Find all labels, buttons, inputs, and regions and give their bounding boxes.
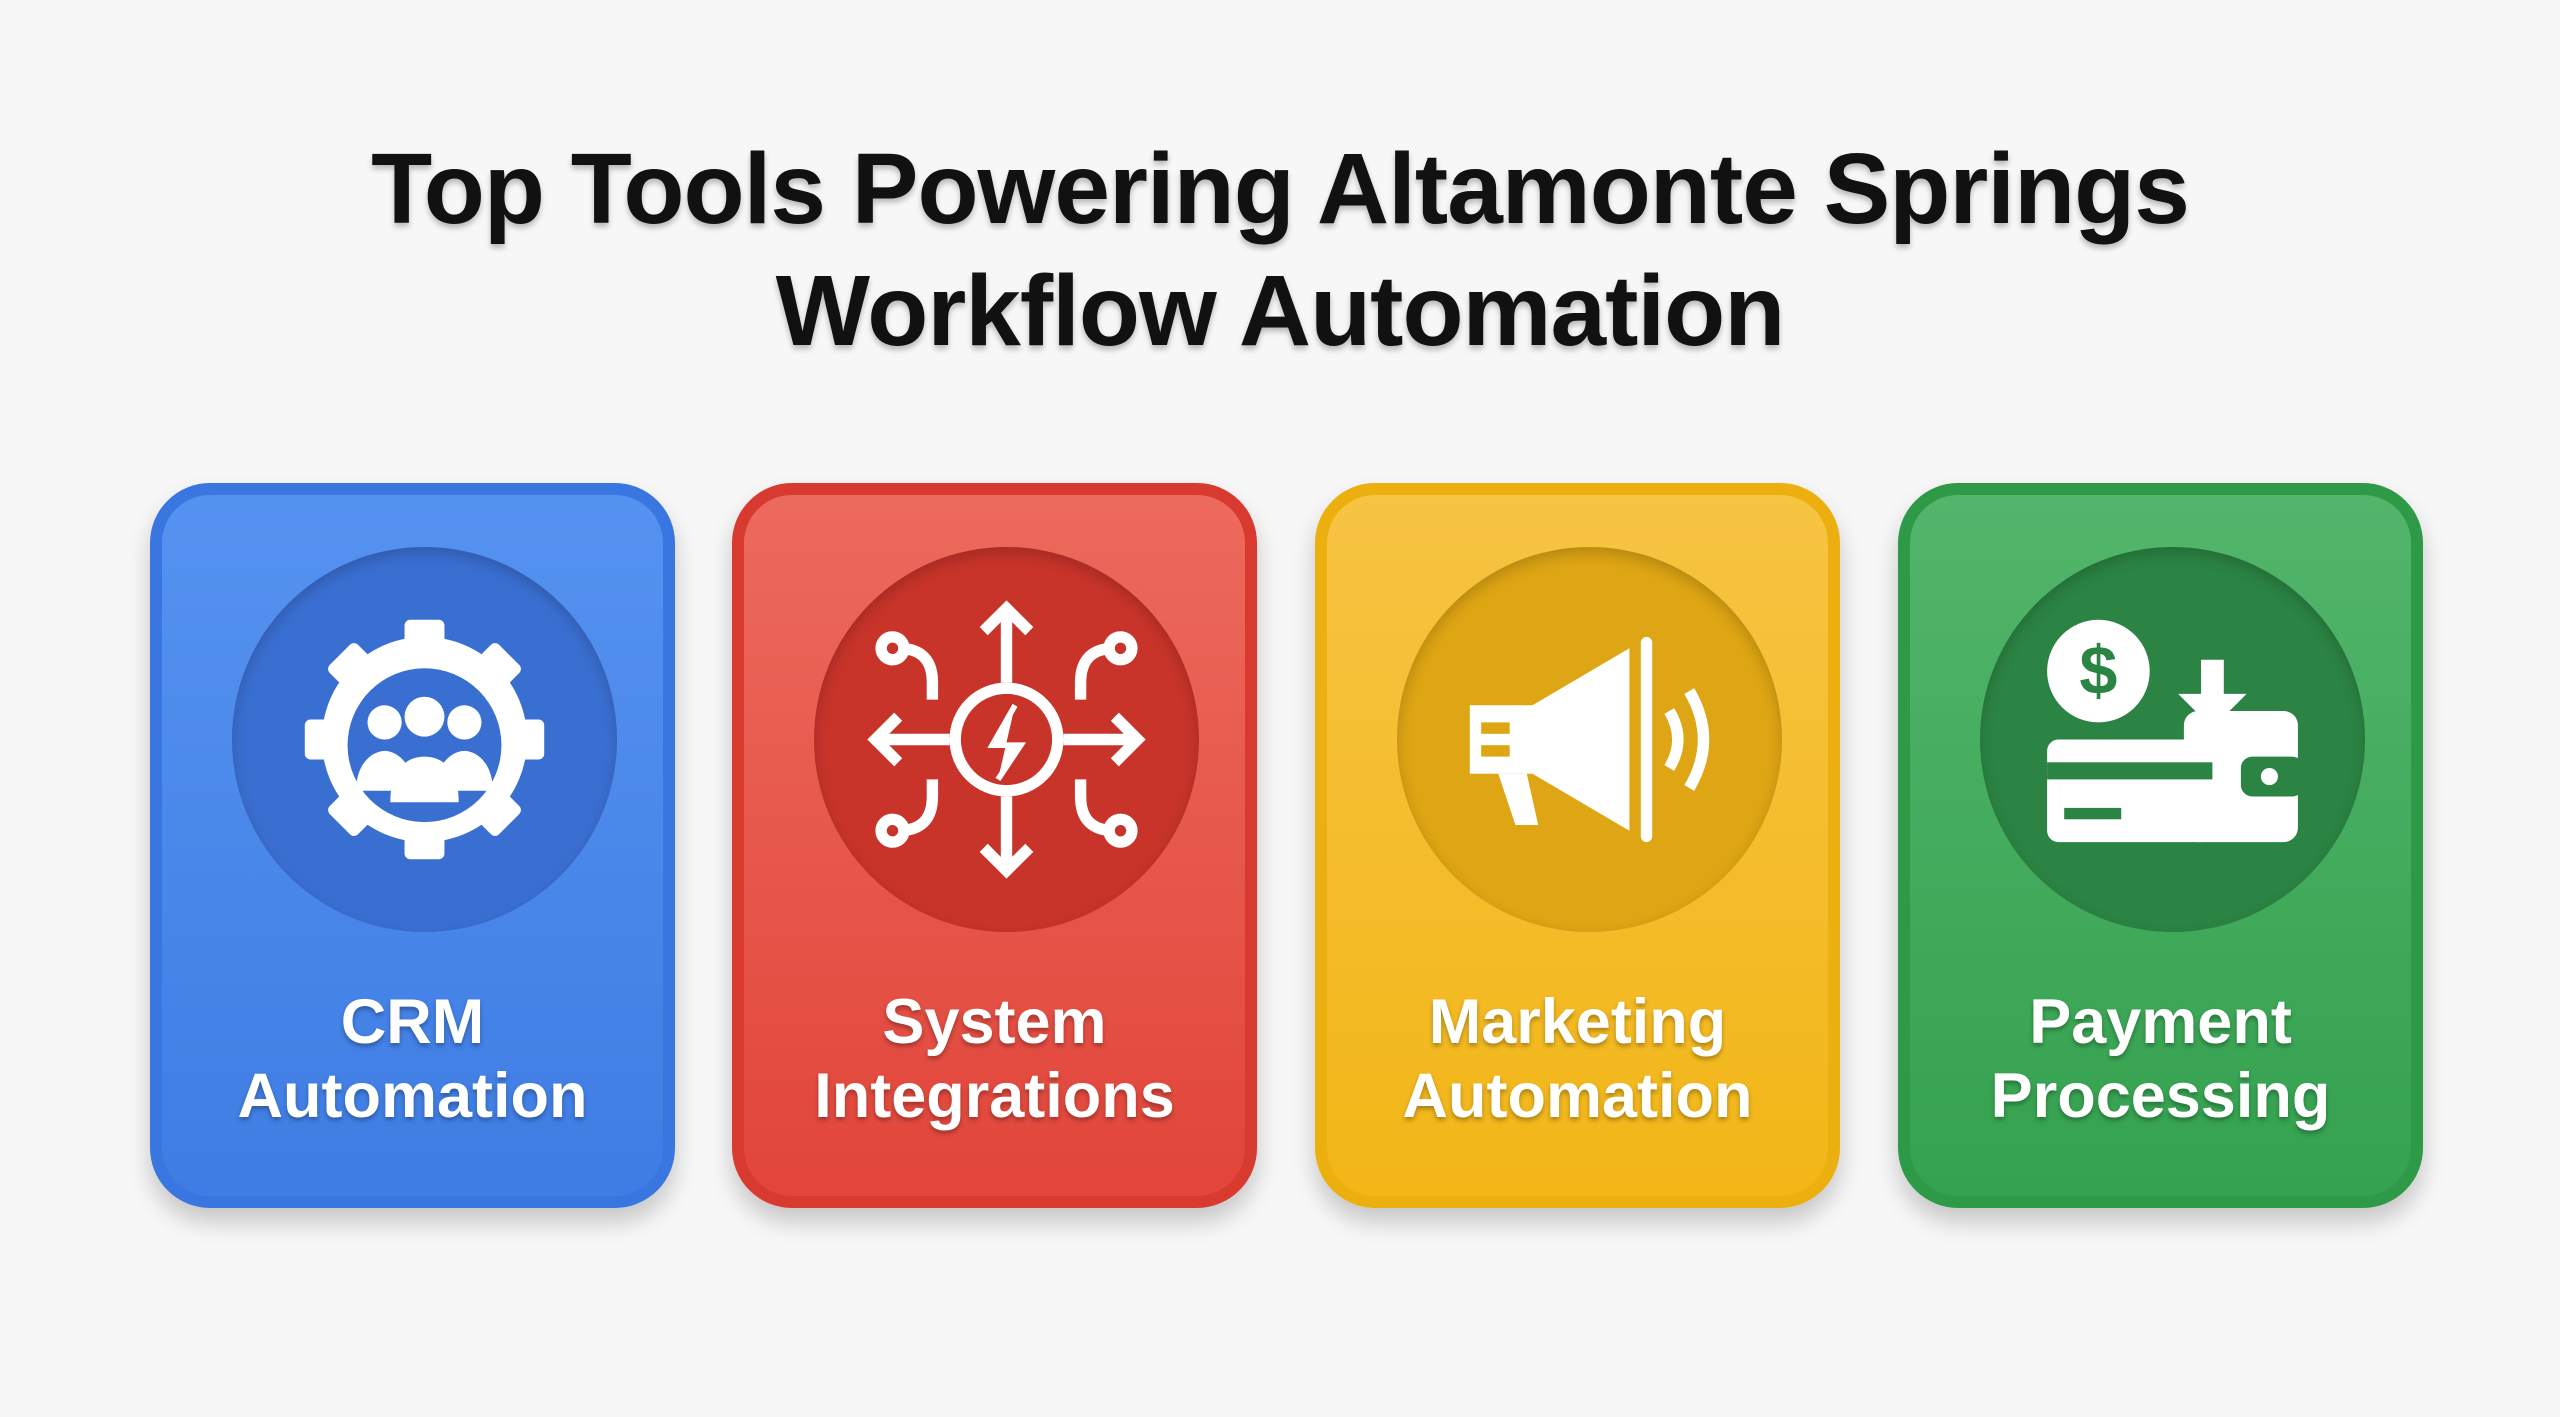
- title: Top Tools Powering Altamonte Springs: [371, 133, 2189, 245]
- label: [814, 987, 1175, 1136]
- label: [1402, 987, 1752, 1131]
- label: System: [882, 987, 1107, 1057]
- label: Integrations: [814, 1061, 1175, 1131]
- icon: integration arrows: [814, 547, 1199, 932]
- icon: megaphone: [1397, 547, 1782, 932]
- panel: Payment Processing: [1898, 483, 2423, 1208]
- label: [238, 987, 587, 1131]
- icon: wallet and coin: [1980, 547, 2365, 932]
- panel: CRM Automation: [150, 483, 675, 1208]
- panel: Marketing Automation: [1315, 483, 1840, 1208]
- label: [1991, 987, 2330, 1136]
- label: Automation: [238, 1061, 587, 1131]
- icon: gear with people: [232, 547, 617, 932]
- label: Payment: [2029, 987, 2292, 1057]
- label: Processing: [1991, 1061, 2330, 1131]
- label: Automation: [1403, 1061, 1752, 1131]
- icon: wallet and coin: $: [2079, 633, 2117, 709]
- title: Workflow Automation: [776, 255, 1784, 367]
- label: Marketing: [1429, 987, 1726, 1057]
- title: [369, 133, 2189, 367]
- panel: System Integrations: [732, 483, 1257, 1208]
- label: CRM: [341, 987, 484, 1057]
